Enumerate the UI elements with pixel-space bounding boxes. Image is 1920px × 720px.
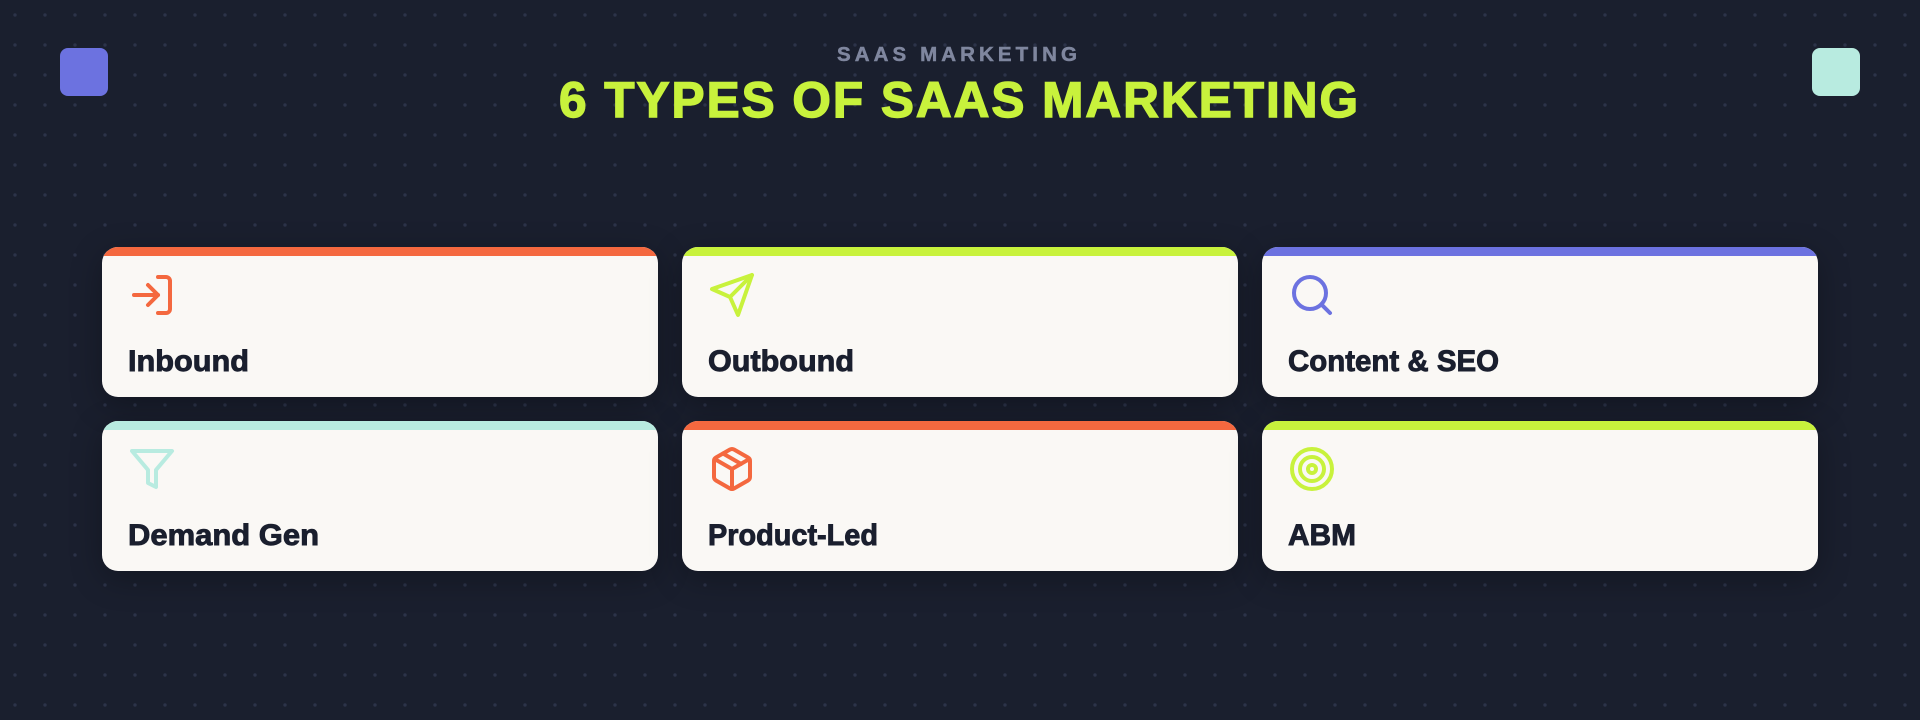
- panel: Content & SEO: [1262, 247, 1818, 397]
- icon: package box: [712, 447, 752, 491]
- panel: Inbound: [102, 247, 658, 397]
- header: [559, 44, 1360, 128]
- card label: Demand Gen: [128, 519, 319, 552]
- icon: target: [1290, 447, 1334, 491]
- card label: ABM: [1288, 519, 1356, 552]
- card label: Content & SEO: [1288, 345, 1499, 378]
- card label: Product-Led: [708, 519, 878, 552]
- icon: paper plane: [710, 272, 754, 317]
- panel: Outbound: [682, 247, 1238, 397]
- panel: Demand Gen: [102, 421, 658, 571]
- title: 6 TYPES OF SAAS MARKETING: [559, 72, 1360, 128]
- icon: magnifier: [1292, 275, 1332, 316]
- decorative square: indigo: [60, 48, 108, 96]
- card label: Inbound: [128, 345, 249, 378]
- decorative square: mint: [1812, 48, 1860, 96]
- eyebrow text: SAAS MARKETING: [837, 44, 1081, 66]
- panel: ABM: [1262, 421, 1818, 571]
- icon: log-in arrow: [132, 275, 172, 315]
- panel: Product-Led: [682, 421, 1238, 571]
- card label: Outbound: [708, 345, 854, 378]
- icon: funnel: [130, 449, 174, 490]
